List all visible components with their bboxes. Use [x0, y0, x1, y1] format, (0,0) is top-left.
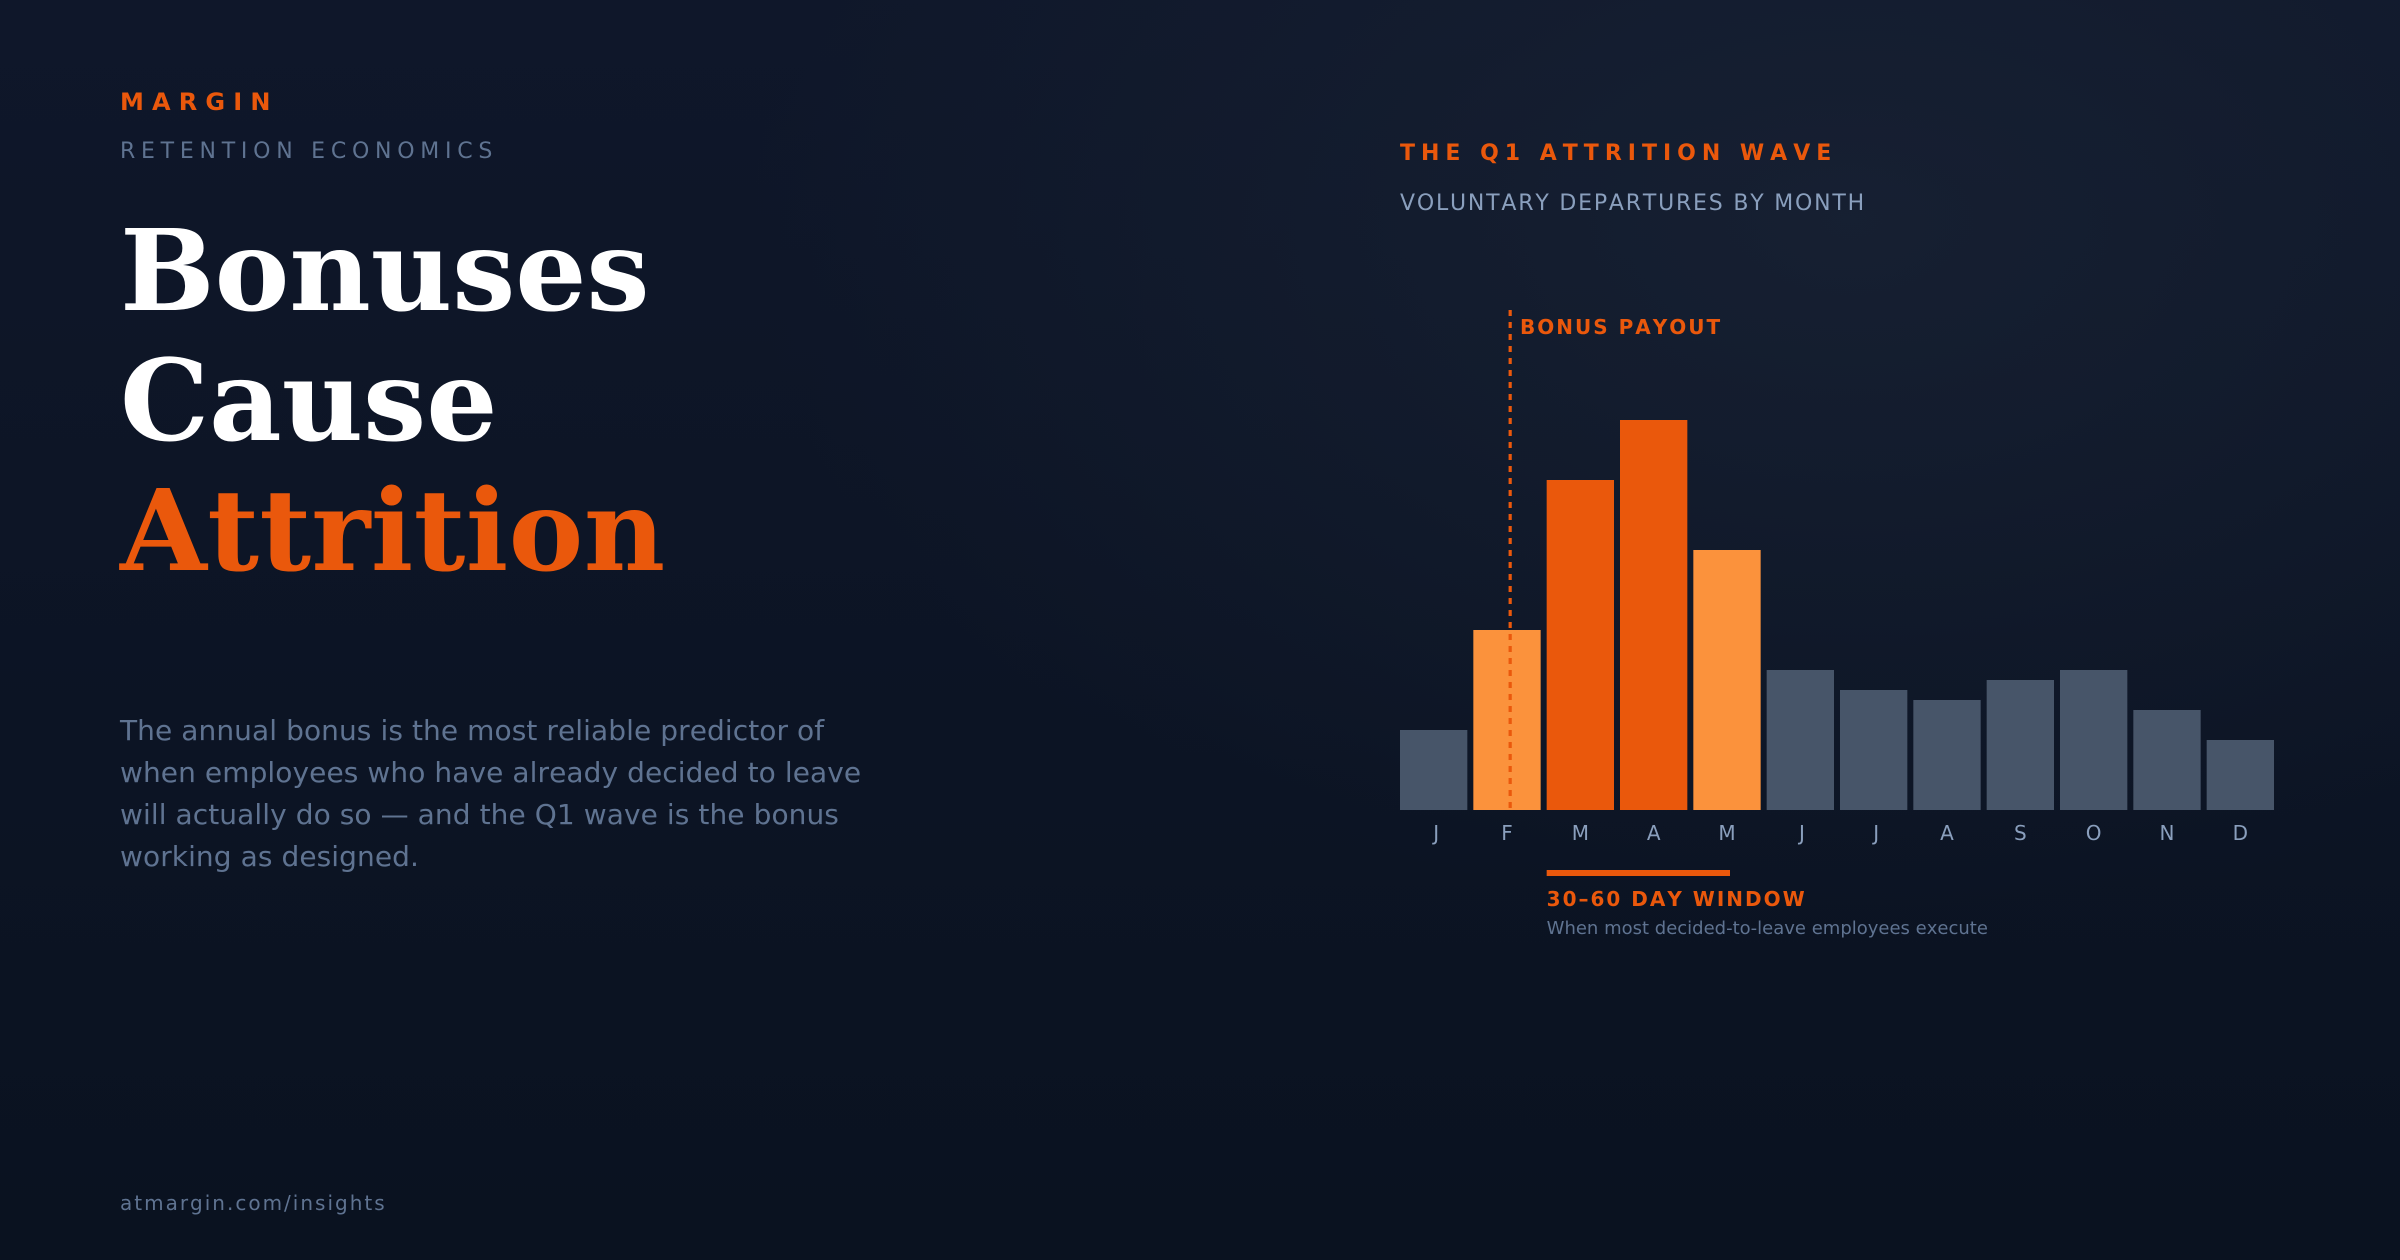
window label: 30–60 DAY WINDOW: [1547, 887, 1807, 911]
brand name: MARGIN: [120, 88, 279, 116]
body paragraph: The annual bonus is the most reliable predictor of: [119, 714, 825, 747]
chart subtitle: VOLUNTARY DEPARTURES BY MONTH: [1400, 191, 1866, 216]
bonus payout label: BONUS PAYOUT: [1520, 315, 1722, 339]
body paragraph: will actually do so — and the Q1 wave is the bonus: [120, 798, 839, 831]
window description: When most decided-to-leave employees execute: [1547, 918, 1988, 939]
bar chart: S: [2014, 821, 2027, 845]
bar chart: [1400, 420, 2274, 845]
footer url: atmargin.com/insights: [120, 1191, 387, 1215]
bar chart: J: [1431, 821, 1439, 845]
bonus payout marker line: [1509, 310, 1512, 810]
bar chart: D: [2233, 821, 2248, 845]
body paragraph: [119, 714, 861, 873]
bar chart: N: [2160, 821, 2174, 845]
title: Attrition: [119, 466, 666, 597]
title: Bonuses: [120, 206, 650, 337]
bar chart: A: [1647, 821, 1661, 845]
title: Cause: [120, 336, 497, 467]
bar chart: F: [1501, 821, 1513, 845]
body paragraph: working as designed.: [120, 840, 419, 873]
chart heading: THE Q1 ATTRITION WAVE: [1400, 141, 1837, 166]
bar chart: J: [1797, 821, 1805, 845]
title: [119, 206, 666, 597]
bar chart: M: [1718, 821, 1736, 845]
bar chart: M: [1572, 821, 1589, 845]
section label: RETENTION ECONOMICS: [120, 139, 498, 164]
bar chart: O: [2086, 821, 2102, 845]
bar chart: A: [1940, 821, 1954, 845]
bar chart: J: [1871, 821, 1879, 845]
body paragraph: when employees who have already decided to leave: [120, 756, 861, 789]
window bracket bar: [1547, 870, 1730, 876]
